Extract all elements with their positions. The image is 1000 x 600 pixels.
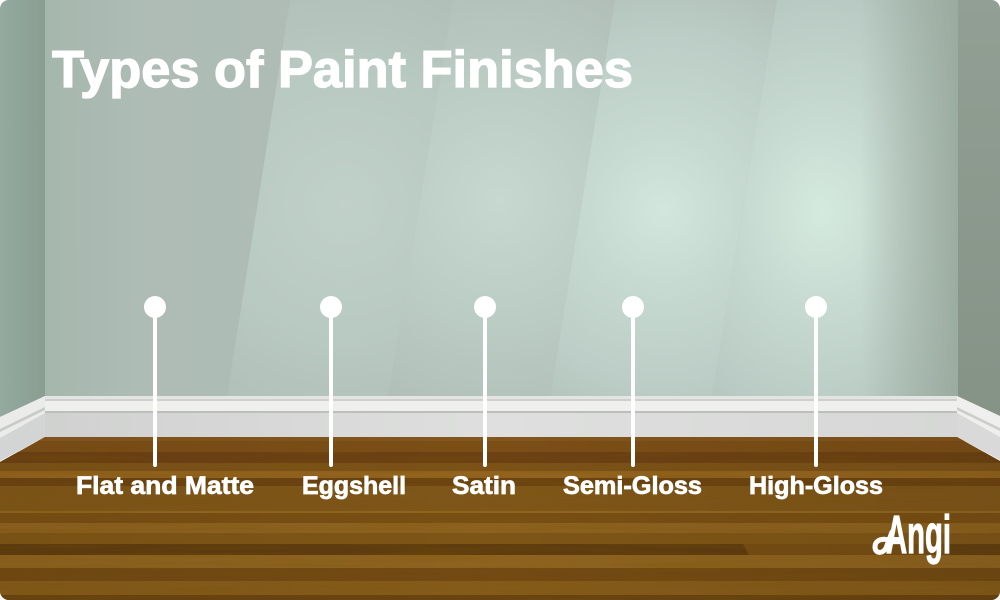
marker: Eggshell: Eggshell [302,472,406,500]
back wall [0,0,1000,400]
marker: Eggshell [302,296,406,500]
logo: Angi [875,505,951,565]
right side wall [958,0,1000,420]
marker: Satin: Satin [452,472,516,500]
title: Types of Paint Finishes [52,41,633,99]
marker: Flat and Matte [76,296,254,500]
left side wall [0,0,45,418]
baseboard [0,396,1000,461]
wood floor [0,437,1000,600]
marker: Flat and Matte: Flat and Matte [76,472,254,500]
marker: Semi-Gloss: Semi-Gloss [563,472,702,500]
marker: High-Gloss [749,296,883,500]
marker: High-Gloss: High-Gloss [749,472,883,500]
marker: Satin [452,296,516,500]
marker: Semi-Gloss [563,296,702,500]
